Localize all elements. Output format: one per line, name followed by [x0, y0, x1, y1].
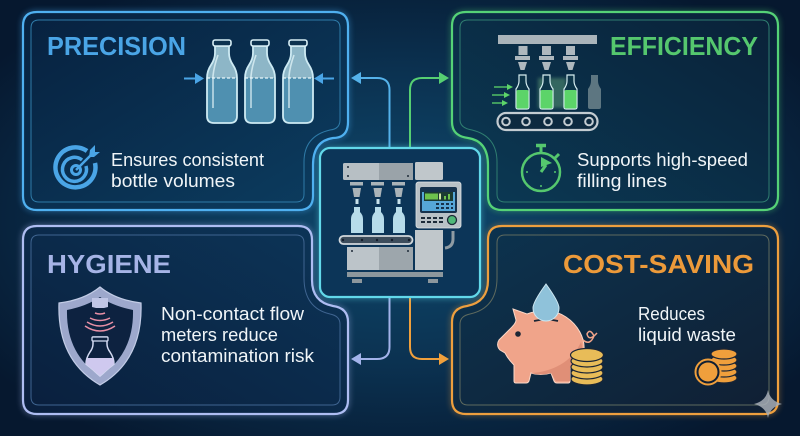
- icon: level arrows: [184, 73, 334, 84]
- panel: central filling machine: [320, 148, 480, 297]
- text: hygiene line 3: contamination risk: [161, 346, 315, 366]
- text: precision: Ensures consistent: [111, 150, 264, 170]
- heading: cost-saving: COST-SAVING: [563, 249, 754, 279]
- icon: coin stack: [570, 348, 604, 385]
- arrow: machine to precision: [351, 72, 390, 148]
- icon: orange coins: [696, 349, 737, 384]
- icon: target: [55, 145, 100, 187]
- icon: shield: [59, 287, 141, 385]
- panel: hygiene: [23, 226, 348, 414]
- text: precision line 2: bottle volumes: [111, 171, 235, 191]
- icon: filling machine: [340, 162, 461, 283]
- text: efficiency: Supports high-speed: [577, 150, 748, 170]
- arrow: machine to hygiene: [351, 297, 390, 365]
- panel: efficiency: [452, 12, 778, 210]
- icon: three bottles: [207, 40, 313, 123]
- icon: control panel: [416, 182, 461, 228]
- icon: piggy bank: [498, 284, 597, 383]
- icon: stopwatch: [522, 146, 560, 191]
- text: hygiene line 2: meters reduce: [161, 325, 278, 345]
- panel: cost-saving: [452, 226, 778, 414]
- panel: precision: [23, 12, 348, 210]
- heading: precision: PRECISION: [47, 31, 186, 61]
- heading: efficiency: EFFICIENCY: [610, 31, 758, 61]
- arrow: machine to efficiency: [410, 72, 449, 148]
- icon: water drop: [533, 284, 559, 321]
- text: cost-saving line 2: liquid waste: [638, 325, 736, 345]
- text: cost-saving line 1: Reduces: [638, 304, 705, 324]
- arrow: machine to cost-saving: [410, 297, 449, 365]
- icon: sparkle watermark: [754, 390, 782, 418]
- text: efficiency line 2: filling lines: [577, 171, 667, 191]
- heading: hygiene: HYGIENE: [47, 249, 171, 279]
- text: hygiene line 1: Non-contact flow: [161, 304, 305, 324]
- icon: filling line: [492, 35, 601, 130]
